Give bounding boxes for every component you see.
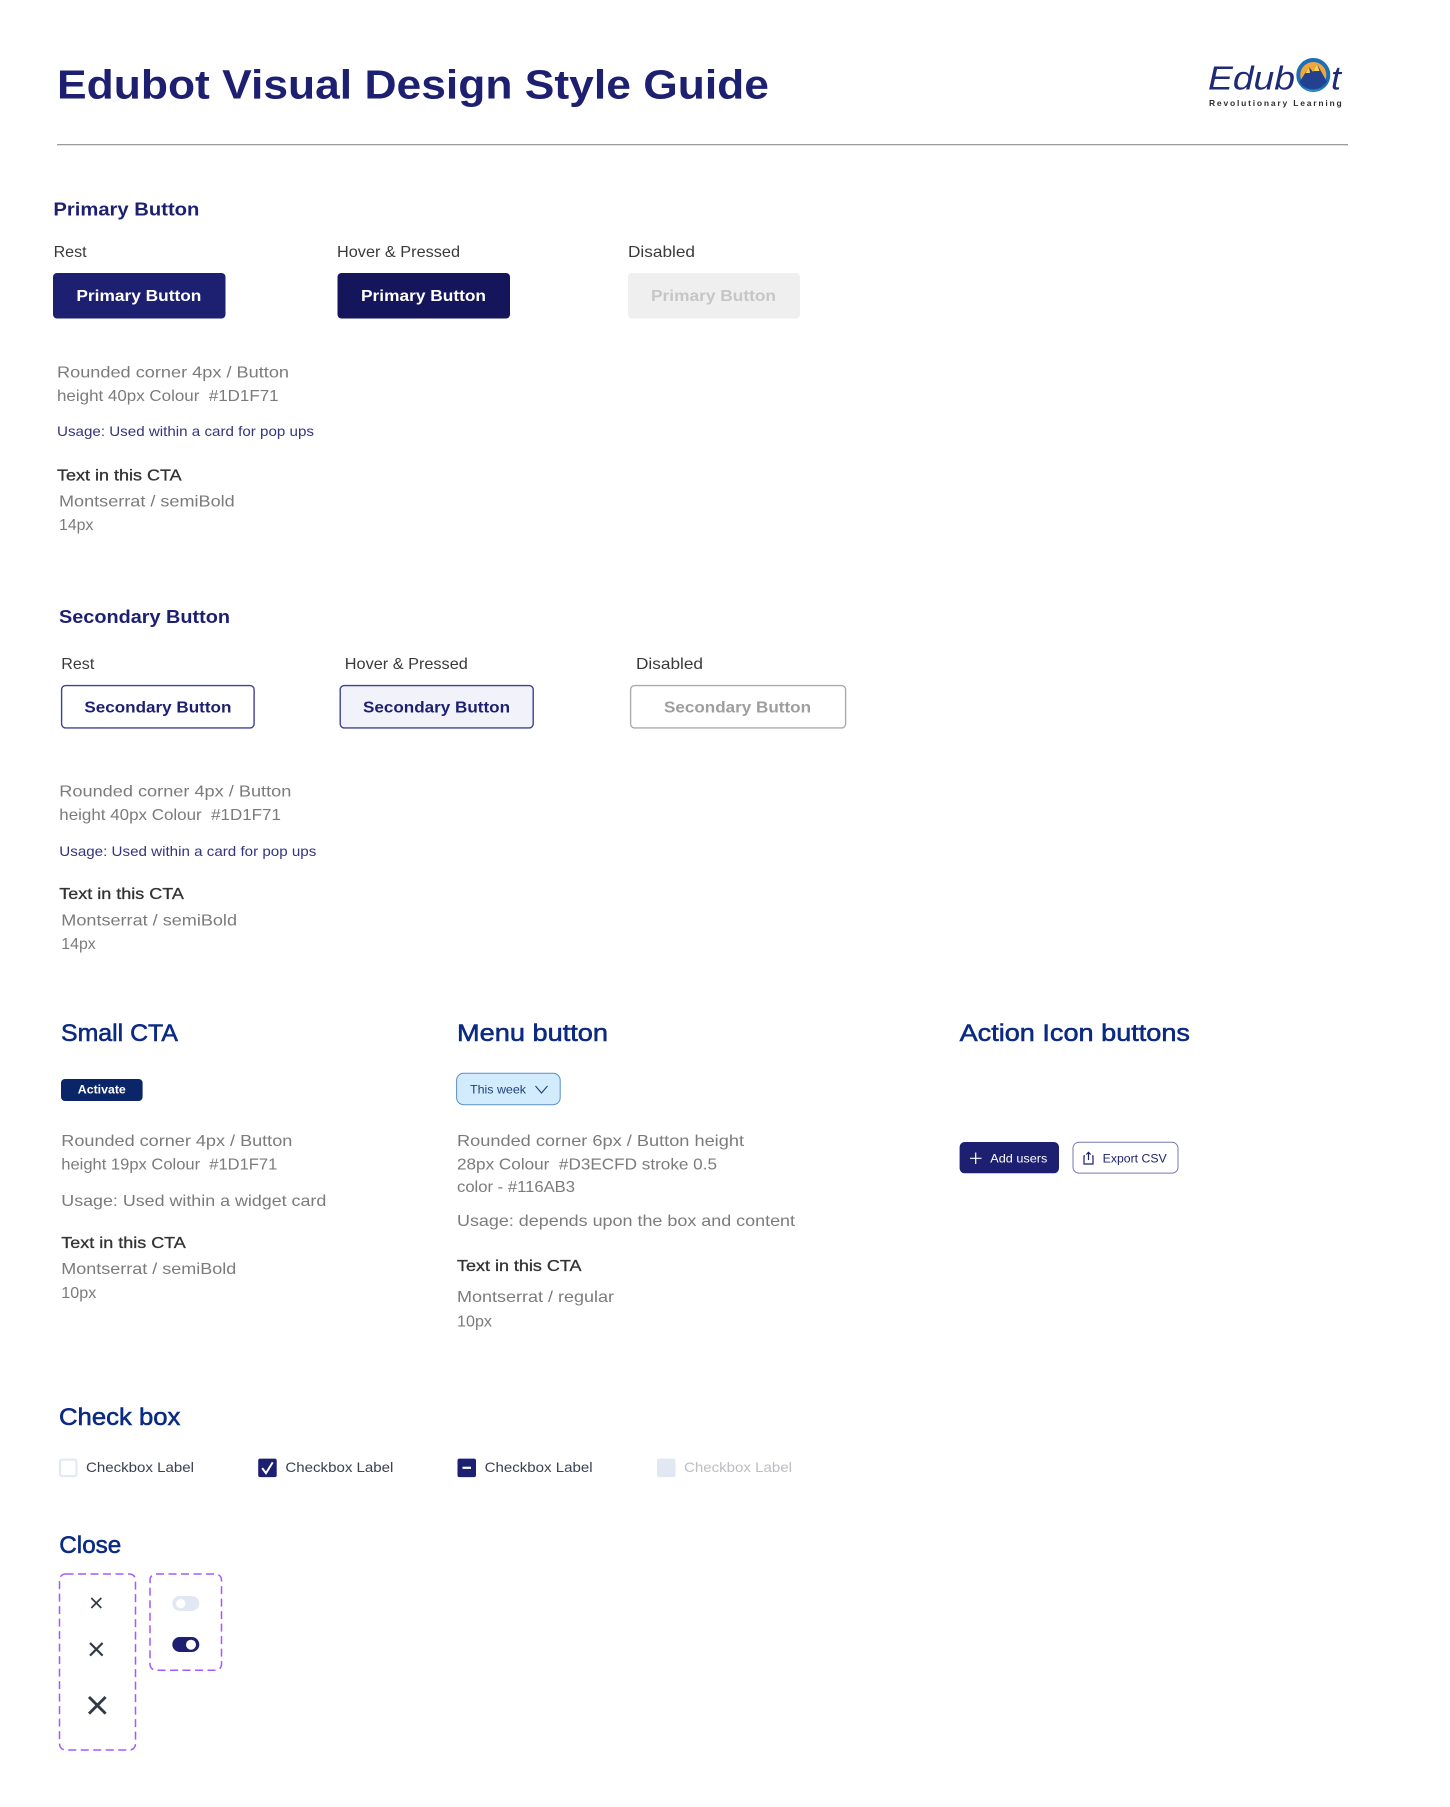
state label: disabled: Disabled — [636, 656, 703, 673]
icon: medium close — [90, 1643, 103, 1656]
cta text specs: Montserrat / semiBold — [59, 494, 235, 511]
button: this week menu: This week — [470, 1083, 527, 1097]
heading: action icon buttons: Action Icon buttons — [960, 1020, 1190, 1047]
checkbox: unchecked: Checkbox Label — [86, 1459, 194, 1475]
button: this week menu — [457, 1073, 560, 1105]
button: primary rest — [53, 273, 226, 318]
button: primary rest: Primary Button — [76, 288, 201, 305]
usage note: Usage: Used within a widget card — [61, 1193, 326, 1210]
cta text specs: 10px — [61, 1285, 96, 1302]
heading: small cta: Small CTA — [61, 1020, 178, 1047]
spec text — [57, 365, 289, 405]
toggle: off — [172, 1596, 199, 1611]
heading: check box: Check box — [59, 1404, 180, 1431]
button: secondary rest — [62, 686, 254, 728]
spec text: Rounded corner 4px / Button — [59, 783, 291, 800]
header — [57, 60, 1348, 145]
cta text specs: Text in this CTA — [457, 1258, 582, 1275]
button: primary hover: Primary Button — [361, 288, 486, 305]
state label: hover and pressed: Hover & Pressed — [345, 656, 468, 673]
checkbox: checked — [258, 1459, 393, 1477]
icon: small close — [91, 1598, 101, 1608]
state label: rest: Rest — [54, 244, 87, 261]
button: secondary disabled: Secondary Button — [664, 700, 811, 717]
state label: disabled: Disabled — [628, 244, 695, 261]
spec text: Rounded corner 6px / Button height — [457, 1133, 745, 1150]
panel: primary button — [53, 198, 800, 534]
heading: secondary button: Secondary Button — [59, 606, 230, 627]
spec text: Rounded corner 4px / Button — [57, 365, 289, 382]
cta text specs — [57, 468, 235, 534]
spec text: height 19px Colour #1D1F71 — [61, 1156, 277, 1173]
spec text: height 40px Colour #1D1F71 — [57, 388, 279, 405]
heading: menu button: Menu button — [457, 1020, 608, 1047]
title: Edubot Visual Design Style Guide — [57, 61, 769, 107]
cta text specs: Montserrat / semiBold — [61, 912, 237, 929]
icon: large close — [89, 1697, 106, 1714]
button: primary disabled: Primary Button — [651, 288, 776, 305]
heading: primary button: Primary Button — [53, 198, 199, 220]
cta text specs — [59, 886, 237, 953]
button: secondary hover: Secondary Button — [363, 700, 510, 717]
cta text specs: 10px — [457, 1314, 492, 1331]
logo: Edubot: t — [1331, 60, 1343, 96]
checkbox: disabled — [657, 1459, 792, 1477]
button: secondary hover — [340, 686, 533, 728]
panel: check box — [59, 1404, 792, 1477]
logo: Edubot — [1208, 60, 1343, 108]
spec text — [59, 783, 291, 824]
state label: hover and pressed: Hover & Pressed — [337, 244, 460, 261]
state label: rest: Rest — [61, 656, 95, 673]
button: export csv: Export CSV — [1103, 1151, 1167, 1165]
cta text specs: Text in this CTA — [59, 886, 184, 903]
cta text specs — [457, 1258, 615, 1331]
cta text specs: Montserrat / regular — [457, 1289, 615, 1306]
checkbox: checked: Checkbox Label — [285, 1459, 393, 1475]
checkbox: indeterminate: Checkbox Label — [485, 1459, 593, 1475]
checkbox: indeterminate — [458, 1459, 593, 1477]
spec text — [457, 1133, 745, 1196]
panel: small cta — [61, 1020, 326, 1302]
cta text specs — [61, 1235, 236, 1302]
panel: secondary button — [59, 606, 846, 953]
spec text: Rounded corner 4px / Button — [61, 1133, 292, 1150]
button: primary hover — [338, 273, 510, 318]
button: primary disabled — [628, 273, 800, 318]
toggle: on — [172, 1637, 199, 1652]
logo: Edubot: Edub — [1208, 60, 1295, 96]
button: activate: Activate — [78, 1083, 126, 1097]
spec text: 28px Colour #D3ECFD stroke 0.5 — [457, 1156, 717, 1173]
usage note: Usage: Used within a card for pop ups — [59, 843, 316, 859]
cta text specs: 14px — [59, 517, 93, 534]
usage note: Usage: depends upon the box and content — [457, 1213, 796, 1230]
toggle variants — [150, 1574, 222, 1670]
button: activate — [61, 1079, 143, 1101]
heading: close: Close — [59, 1532, 121, 1559]
panel: close — [59, 1532, 221, 1750]
panel: menu button — [457, 1020, 796, 1331]
cta text specs: Montserrat / semiBold — [61, 1261, 236, 1278]
button: secondary disabled — [631, 686, 846, 728]
button: secondary rest: Secondary Button — [84, 700, 231, 717]
button: export csv — [1073, 1142, 1178, 1173]
spec text: height 40px Colour #1D1F71 — [59, 807, 281, 824]
cta text specs: 14px — [61, 936, 96, 953]
cta text specs: Text in this CTA — [57, 468, 182, 485]
spec text: color - #116AB3 — [457, 1179, 575, 1196]
usage note: Usage: Used within a card for pop ups — [57, 423, 314, 439]
button: add users — [960, 1142, 1059, 1173]
close icon variants — [60, 1574, 136, 1750]
cta text specs: Text in this CTA — [61, 1235, 186, 1252]
checkbox: disabled: Checkbox Label — [684, 1459, 792, 1475]
button: add users: Add users — [990, 1151, 1047, 1165]
spec text — [61, 1133, 292, 1173]
logo: Edubot: Revolutionary Learning — [1209, 98, 1342, 108]
header divider — [57, 144, 1348, 146]
panel: action icon buttons — [960, 1020, 1190, 1173]
